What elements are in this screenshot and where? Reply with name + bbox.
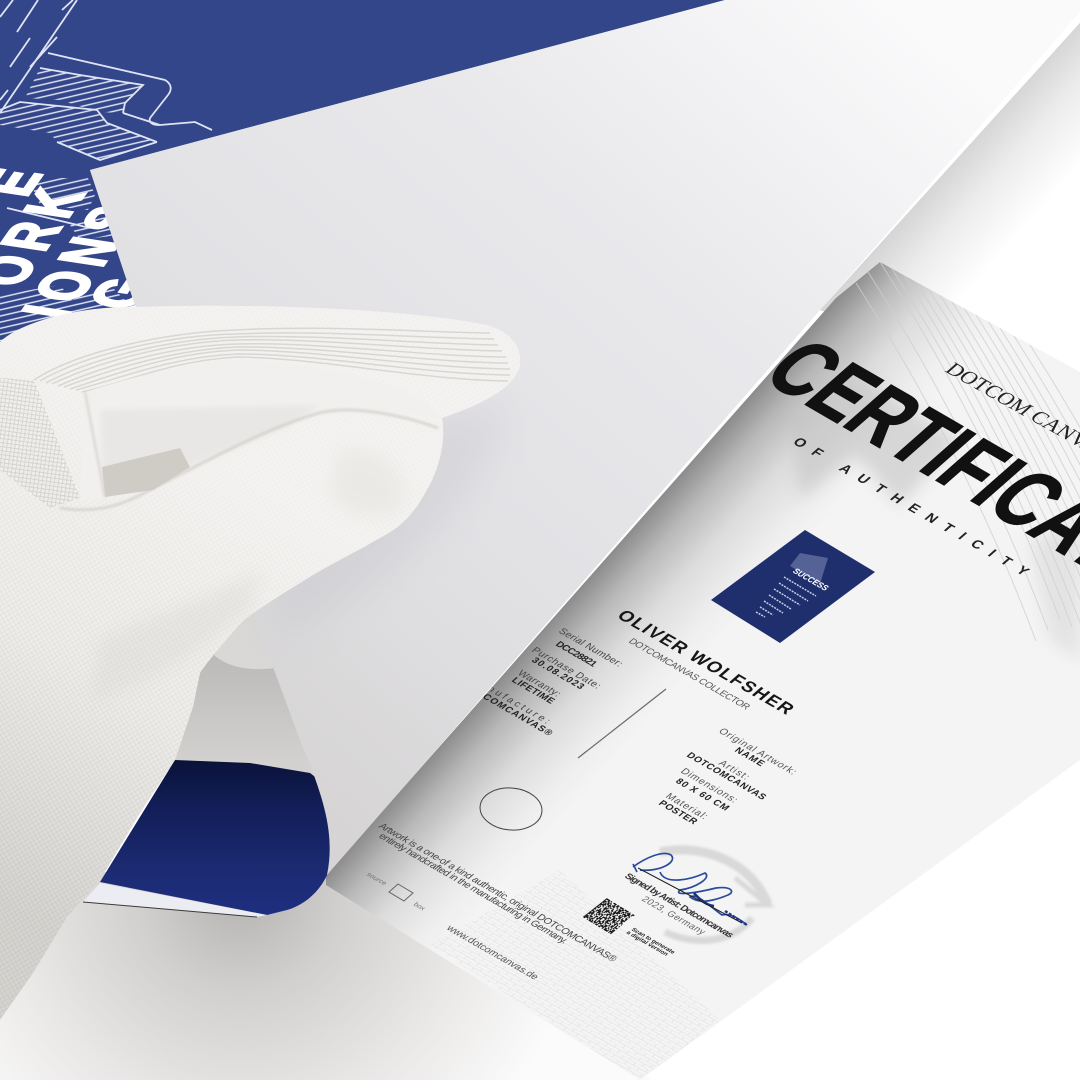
cuff ribs (0, 378, 80, 508)
curled paper back (90, 0, 1080, 875)
statement text: entirely handcrafted in the manufacturing in Germany. (376, 832, 570, 946)
details: left column: Serial Number: (556, 627, 625, 669)
details: left column: DCC28821 (553, 640, 600, 669)
inner knit patch (102, 448, 190, 497)
statement text: Artwork is a one-of a kind authentic, original DOTCOMCANVAS® (376, 822, 619, 964)
details: left column: DOTCOMCANVAS® (460, 681, 555, 738)
gap under the hand (165, 590, 340, 800)
footer logos (366, 873, 426, 910)
signature caption: Signed by Artist: Dotcomcanvas (622, 872, 736, 940)
footer logos: box (412, 902, 427, 912)
signature caption: 2023, Germany (639, 895, 708, 937)
fingertip ribs (34, 328, 510, 392)
subheading: OF AUTHENTICITY (790, 434, 1034, 578)
footer logos: source (365, 872, 388, 887)
QR code (583, 898, 635, 934)
signature (633, 853, 747, 925)
certificate sheet (326, 262, 1080, 1080)
inner palm (86, 374, 146, 392)
details: right column: Original Artwork: (716, 727, 799, 777)
QR caption: Scan to generate (630, 927, 676, 956)
website: www.dotcomcanvas.de (443, 923, 541, 982)
navy poster underside (83, 760, 345, 917)
navy poster front with artwork (0, 0, 725, 345)
details: right column: Material: (663, 792, 710, 821)
details: right column: Artist: (716, 759, 752, 782)
signature line: collector (578, 689, 666, 758)
details: right column: DOTCOMCANVAS (684, 751, 769, 802)
poster lettering (0, 168, 135, 317)
details: left column: Purchase Date: (529, 646, 603, 691)
details: left column: Manufacture: (468, 675, 553, 726)
glove knit texture (0, 475, 231, 1018)
details: right column: Dimensions: (678, 767, 740, 805)
details: right column: NAME (732, 746, 767, 768)
details: right column: 80 X 60 CM (673, 777, 732, 813)
details: left column: 30.08.2023 (529, 656, 587, 691)
poster lettering: G (73, 273, 166, 313)
knuckle flecks (342, 462, 392, 504)
details: right column (656, 727, 799, 827)
QR caption: a digital version (625, 930, 669, 957)
artwork thumbnail (711, 530, 875, 643)
stamp behind signature (660, 850, 768, 940)
details: left column: Warranty: (515, 669, 563, 699)
details: left column (460, 627, 625, 738)
artwork thumbnail: SUCCESS (791, 567, 831, 592)
finger crease (60, 410, 438, 510)
white glove hand (0, 300, 530, 1030)
collector name: OLIVER WOLFSHER (613, 606, 799, 718)
details: right column: POSTER (656, 799, 700, 827)
details: left column: LIFETIME (509, 676, 557, 706)
poster lettering: IONS (6, 195, 160, 322)
collector label: DOTCOMCANVAS COLLECTOR (626, 637, 752, 712)
seal circle (480, 787, 542, 831)
